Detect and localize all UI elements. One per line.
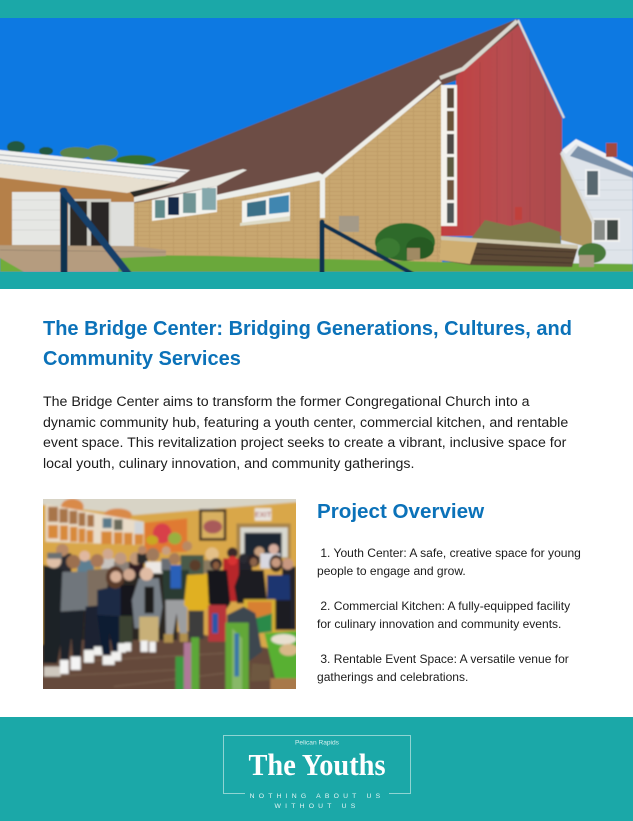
list item: rentable event space: 3. Rentable Event Space: A versatile venue for — [320, 652, 569, 666]
wing windows — [152, 186, 290, 226]
student, green puffer — [162, 570, 189, 600]
list item: youth center — [317, 546, 581, 578]
shrub beside wall — [375, 223, 435, 261]
concrete steps — [0, 245, 166, 272]
exit sign — [255, 508, 271, 521]
floor — [31, 632, 310, 703]
wall plaque — [339, 216, 359, 232]
student, navy sweatshirt — [267, 575, 290, 600]
student, brown hoodie — [87, 568, 109, 607]
list item: youth center: 1. Youth Center: A safe, creative space for young — [320, 546, 581, 560]
student, black top — [121, 585, 135, 617]
student, grey cardigan — [132, 578, 163, 628]
painted chairs and table — [175, 599, 310, 703]
logo: The Youths: WITHOUT US — [275, 803, 359, 810]
porch wall and garage — [0, 172, 134, 248]
student, grey hoodie — [61, 572, 90, 612]
flower mural — [145, 518, 187, 553]
list item: commercial kitchen: 2. Commercial Kitchen: A fully-equipped facility — [320, 599, 570, 613]
student, black puffer — [234, 570, 267, 603]
blue railing — [63, 191, 413, 280]
logo: The Youths: Pelican Rapids — [295, 740, 340, 746]
back row of students — [55, 541, 296, 640]
eave over low wing — [127, 169, 247, 203]
restaurant wall and ceiling — [31, 490, 310, 703]
list item: commercial kitchen: for culinary innovation and community events. — [317, 617, 561, 631]
main roof — [130, 19, 519, 206]
grass — [80, 255, 633, 272]
front row of students — [43, 553, 290, 677]
brick wall under gable — [323, 84, 442, 266]
group photo: youth in restaurant: EXIT — [255, 510, 272, 519]
lower teal band — [0, 272, 633, 289]
intro paragraph: The Bridge Center aims to transform the former Congregational Church into a — [43, 394, 530, 410]
brick wall, low wing — [134, 178, 326, 266]
logo: The Youths: The Youths — [248, 748, 386, 782]
logo: The Youths: NOTHING ABOUT US — [250, 793, 384, 800]
intro paragraph: local youth, culinary innovation, and community gatherings. — [43, 456, 414, 472]
heading: project overview: Project Overview — [317, 500, 484, 523]
list item: rentable event space: gatherings and celebrations. — [317, 670, 468, 684]
footer band with logo — [0, 717, 633, 821]
downspout — [320, 178, 325, 218]
student, black coat and red skirt — [207, 570, 230, 615]
list item: commercial kitchen — [317, 599, 570, 631]
doorway — [236, 523, 291, 558]
group photo: youth in restaurant — [43, 499, 296, 689]
white neighbouring house — [561, 140, 633, 264]
intro paragraph: dynamic community hub, featuring a youth center, commercial kitchen, and rentable — [43, 415, 568, 431]
far-left student, black jacket — [43, 565, 64, 663]
far brick wall — [561, 155, 592, 248]
wall menu board — [46, 499, 144, 545]
entry doors — [68, 199, 111, 247]
gable window strip — [441, 85, 457, 226]
eave over gable wing — [207, 172, 325, 201]
planter box — [439, 238, 578, 267]
sky — [0, 0, 633, 300]
distant trees — [7, 141, 156, 165]
hero photo: church building — [0, 18, 633, 272]
title — [43, 318, 572, 370]
list item: youth center: people to engage and grow. — [317, 564, 466, 578]
list item: rentable event space — [317, 652, 569, 684]
weeds on planter — [470, 220, 561, 244]
title: Community Services — [43, 348, 241, 370]
intro paragraph — [43, 394, 568, 472]
framed painting — [199, 509, 226, 541]
porch canopy — [0, 161, 173, 193]
shrub and rock right — [578, 243, 606, 263]
student, yellow puffer — [184, 574, 210, 611]
red gable panel — [441, 25, 562, 236]
student, navy jacket — [97, 585, 123, 617]
intro paragraph: event space. This revitalization project seeks to create a vibrant, inclusive space for — [43, 435, 566, 451]
top teal band — [0, 0, 633, 18]
gable trim — [323, 81, 440, 177]
title: The Bridge Center: Bridging Generations, Cultures, and — [43, 318, 572, 340]
logo: The Youths — [223, 735, 411, 810]
